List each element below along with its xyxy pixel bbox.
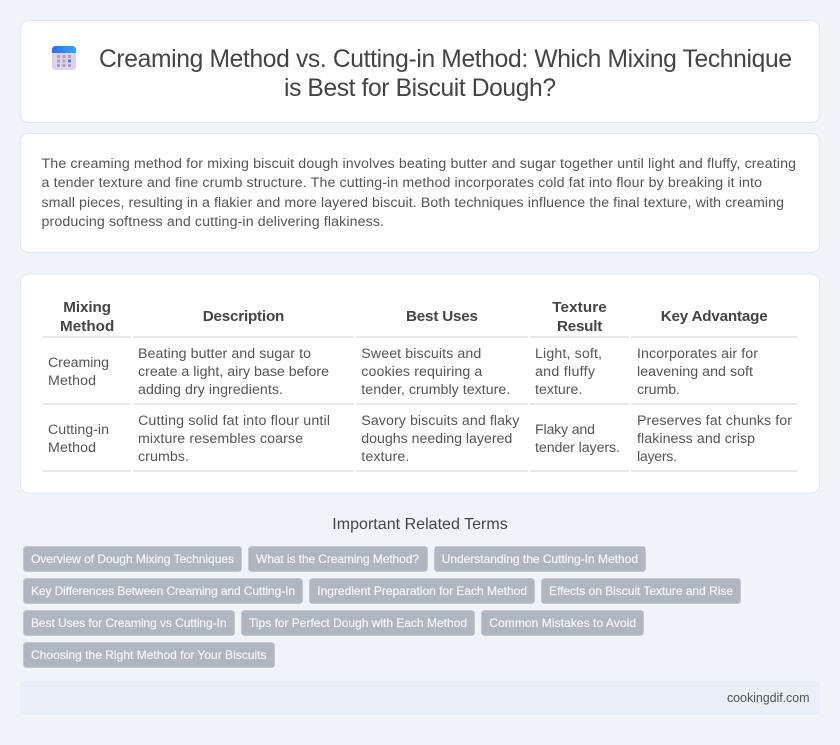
tag [24,610,234,636]
tag: What is the Creaming Method? [256,552,419,566]
table row: creaming method: crumb. [637,382,680,398]
table row: cutting-in method: Savory biscuits and flaky [361,413,520,429]
panel: related term tags [24,546,740,668]
tag: Choosing the Right Method for Your Biscuits [31,648,266,662]
tag [482,610,644,636]
footer: cookingdif.com [727,691,810,705]
table row: cutting-in method: layers. [637,449,677,465]
panel: comparison table [20,274,820,493]
table row: creaming method: leavening and soft [637,364,753,380]
table header row: Best Uses [406,308,478,325]
table row: creaming method: Sweet biscuits and [361,346,481,362]
tag: Understanding the Cutting-In Method [442,552,638,566]
table row: cutting-in method [48,413,792,465]
table row: cutting-in method: mixture resembles coarse [138,431,303,447]
icon: calendar [52,46,76,70]
table row: cutting-in method: crumbs. [138,449,189,465]
table row: creaming method: cookies requiring a [361,364,482,380]
tag [242,610,474,636]
table row: creaming method: Creaming [48,355,109,371]
table header row: Mixing [63,299,111,316]
tag [24,642,274,668]
footer [20,681,820,715]
table row: creaming method: adding dry ingredients. [138,382,283,398]
tag [24,578,302,604]
table header row: Method [60,318,114,335]
table header row [60,299,768,335]
text block: introduction paragraph: a tender texture and fine crumb structure. The cutting-in method incorporates cold fat into flour by breaking it into [42,175,762,191]
tag: Overview of Dough Mixing Techniques [31,552,234,566]
tag [434,546,646,572]
table header row: Result [557,318,602,335]
table row: cutting-in method: Preserves fat chunks for [637,413,792,429]
tag [310,578,534,604]
table row: creaming method [48,346,758,398]
table row: creaming method: create a light, airy base before [138,364,329,380]
tag [248,546,428,572]
panel: introduction [20,134,820,252]
tag: Best Uses for Creaming vs Cutting-In [31,616,226,630]
tag: Key Differences Between Creaming and Cutting-In [31,584,295,598]
title: Creaming Method vs. Cutting-in Method: Which Mixing Technique [99,46,792,73]
table header row: Key Advantage [661,308,768,325]
table row: creaming method: Beating butter and sugar to [138,346,311,362]
tag: Common Mistakes to Avoid [489,616,636,630]
table row: cutting-in method: Cutting-in [48,422,109,438]
tag: Ingredient Preparation for Each Method [317,584,527,598]
tag: Effects on Biscuit Texture and Rise [549,584,733,598]
table header row: Texture [552,299,607,316]
heading: important related terms: Important Related Terms [332,516,508,533]
title [99,46,792,102]
text block: introduction paragraph [42,156,796,230]
table header row: Description [203,308,284,325]
table row: creaming method: texture. [535,382,582,398]
table row: cutting-in method: flakiness and crisp [637,431,755,447]
table row: creaming method: and fluffy [535,364,596,380]
panel: title header [20,20,820,122]
title: is Best for Biscuit Dough? [284,75,556,102]
tag [542,578,740,604]
text block: introduction paragraph: producing softness and cutting-in delivering flakiness. [42,214,384,230]
table row: creaming method: Method [48,373,96,389]
table row: cutting-in method: texture. [361,449,409,465]
table row: creaming method: tender, crumbly texture. [361,382,510,398]
table row: cutting-in method: Flaky and [535,422,595,438]
table row: cutting-in method: doughs needing layered [361,431,512,447]
table row: cutting-in method: Method [48,440,96,456]
text block: introduction paragraph: The creaming method for mixing biscuit dough involves beating butter and sugar together until light and fluffy, creating [42,156,796,172]
table row: creaming method: Incorporates air for [637,346,758,362]
tag: Tips for Perfect Dough with Each Method [249,616,467,630]
table row: creaming method: Light, soft, [535,346,602,362]
tag [24,546,242,572]
table row: cutting-in method: tender layers. [535,440,620,456]
text block: introduction paragraph: small pieces, resulting in a flakier and more layered biscuit. Both techniques influence the final texture, with creaming [42,195,784,211]
table row: cutting-in method: Cutting solid fat into flour until [138,413,330,429]
